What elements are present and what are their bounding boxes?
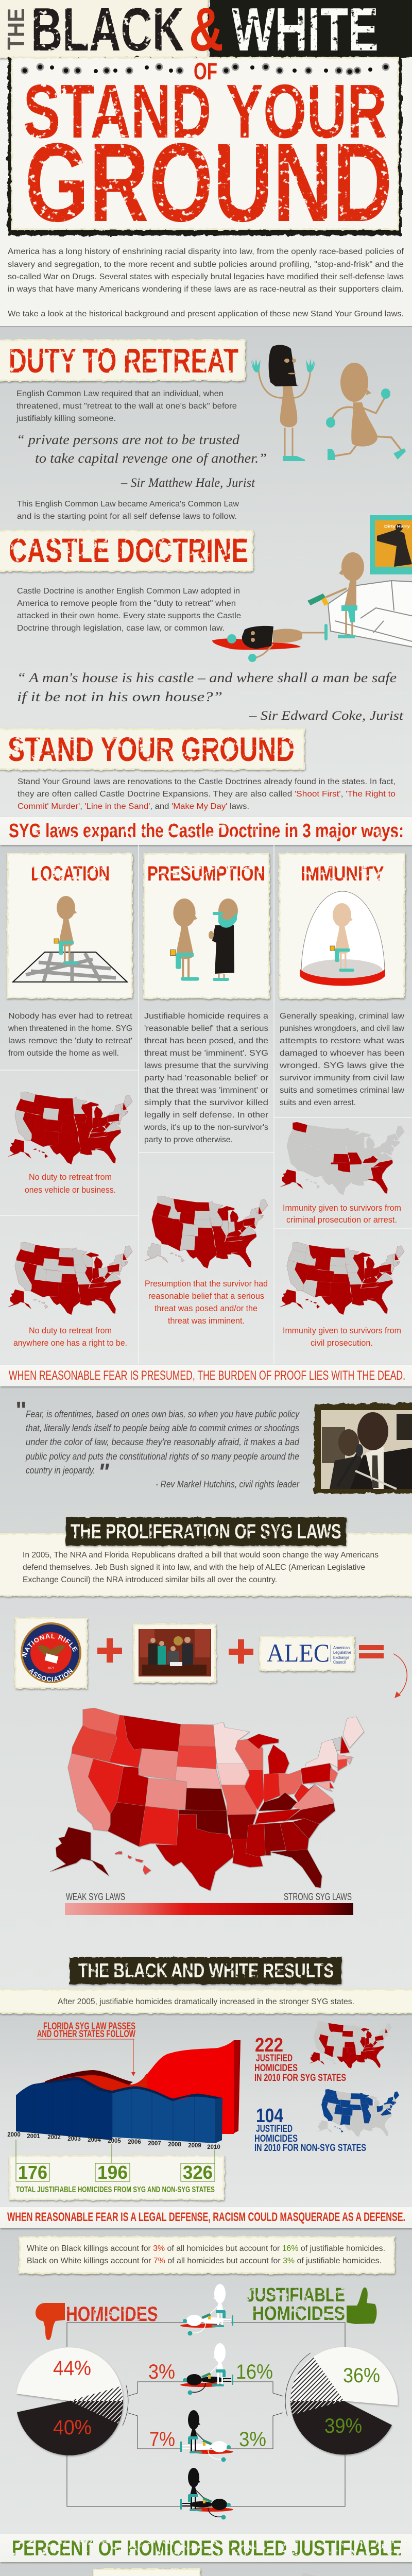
heading: justifiable homicides <box>246 2284 377 2325</box>
callout: 104 non-SYG states: JUSTIFIED <box>256 2124 293 2134</box>
callout: SYG states <box>4 2569 285 2576</box>
icon: equals and curved arrow <box>359 1645 407 1698</box>
map: presumption <box>145 1196 268 1268</box>
panel: immunity: survivor immunity from civil law <box>280 1074 404 1082</box>
axis year labels: 2001 <box>27 2133 40 2140</box>
panel: immunity: IMMUNITY <box>301 862 384 885</box>
section: castle doctrine: America to remove people from the "duty to retreat" when <box>17 599 236 608</box>
intro text: We take a look at the historical background and present application of these new Stand Your Ground laws. <box>8 310 404 318</box>
legend: weak to strong: WEAK SYG LAWS <box>66 1892 125 1903</box>
panel: immunity: Immunity given to survivors from <box>283 1326 401 1335</box>
chart: homicides vs justifiable homicides: 3% <box>148 2361 175 2383</box>
panel: presumption: simply that the survivor killed <box>144 1098 268 1107</box>
section: proliferation of SYG laws: In 2005, The NRA and Florida Republicans drafted a bill that would soon change the way Americans <box>23 1551 379 1560</box>
logo: National Rifle Association: NATIONAL RIFLE <box>22 1633 78 1657</box>
axis year labels: 2004 <box>88 2137 101 2143</box>
axis year labels: 2002 <box>47 2134 61 2141</box>
section: castle doctrine: – Sir Edward Coke, Jurist <box>249 709 404 723</box>
section: duty to retreat: English Common Law required that an individual, when <box>16 389 224 398</box>
axis year labels: 2008 <box>168 2142 181 2148</box>
banner: burden of proof <box>0 1365 412 1386</box>
map: SYG states small <box>309 2021 391 2069</box>
legend: weak to strong <box>65 1892 353 1915</box>
panel: location: No duty to retreat from <box>29 1326 112 1335</box>
quote: Hutchins: Fear, is oftentimes, based on ones own bias, so when you have public policy <box>26 1409 300 1419</box>
panel: presumption: Presumption that the survivor had <box>145 1279 268 1289</box>
axis year labels: 2007 <box>148 2141 161 2147</box>
section: castle doctrine: if it be not in his own house?” <box>17 689 222 704</box>
callout: Florida SYG passes: AND OTHER STATES FOLLOW <box>37 2029 135 2040</box>
panel: location <box>8 854 133 1348</box>
quote: Hutchins: under the color of law, because they're reasonably afraid, it makes a bad <box>26 1437 300 1447</box>
callout: 222 SYG states: IN 2010 FOR SYG STATES <box>254 2073 346 2083</box>
panel: presumption <box>144 854 269 1326</box>
panel: immunity: Immunity given to survivors from <box>283 1203 401 1213</box>
section: stand your ground: they are often called Castle Doctrine Expansions. They are also called 'Shoot First' , 'The Right to <box>18 790 396 799</box>
icon: person running away <box>326 363 406 460</box>
pie: homicides: 40% <box>53 2416 92 2439</box>
axis year labels: 2003 <box>67 2136 81 2142</box>
panel: immunity <box>279 854 404 1348</box>
panel: immunity: suits and even arrest. <box>280 1098 356 1107</box>
logo: ALEC <box>260 1637 354 1670</box>
section heading: black and white results: THE BLACK AND WHITE RESULTS <box>78 1960 334 1982</box>
panel: total justifiable homicides: TOTAL JUSTIFIABLE HOMICIDES FROM SYG AND NON-SYG STATES <box>16 2185 215 2194</box>
quote: Hutchins: - Rev Markel Hutchins, civil rights leader <box>156 1479 300 1489</box>
heading: homicides <box>36 2303 158 2340</box>
panel: immunity: suits and sometimes criminal law <box>280 1086 404 1095</box>
panel: immunity: attempts to restore what was <box>280 1037 404 1045</box>
panel: presumption: Justifiable homicide requires a <box>144 1012 268 1021</box>
panel: location: when threatened in the home. SYG <box>8 1024 132 1033</box>
quote: Hutchins <box>15 1397 412 1494</box>
panel: immunity: wronged. SYG laws give the <box>279 1061 404 1070</box>
axis year labels: 2005 <box>108 2138 121 2144</box>
icon: standing figure <box>170 899 199 981</box>
section: duty to retreat: threatened, must "retreat to the wall at one's back" before <box>16 402 237 411</box>
heading: justifiable homicides: HOMICIDES <box>252 2303 345 2325</box>
icon: plus <box>97 1638 122 1663</box>
logo: National Rifle Association <box>13 1617 90 1691</box>
panel: presumption: party had 'reasonable belief' or <box>144 1074 269 1082</box>
intro text: in ways that have many Americans wondering if these laws are as race-neutral as their supporters claim. <box>8 285 404 294</box>
section: proliferation of SYG laws: Exchange Council) the NRA introduced similar bills all over the country. <box>23 1575 277 1584</box>
panel: presumption: laws presume that the surviving <box>144 1061 268 1070</box>
legend: weak to strong: STRONG SYG LAWS <box>284 1892 352 1903</box>
icons: shooter and victim pairs <box>180 2284 233 2519</box>
panel: location: laws remove the 'duty to retreat' <box>8 1037 132 1045</box>
map: no duty anywhere <box>8 1242 132 1315</box>
heading: homicides: HOMICIDES <box>66 2303 158 2326</box>
panel: location: anywhere one has a right to be. <box>13 1338 127 1348</box>
logo: ALEC: Council <box>333 1660 346 1665</box>
panel: location: ones vehicle or business. <box>25 1185 116 1195</box>
panel: presumption: threat must be 'imminent'. SYG <box>144 1049 268 1058</box>
chart: homicides vs justifiable homicides: 3% <box>239 2428 266 2451</box>
panel: presumption: legally in self defense. In other <box>144 1111 269 1120</box>
callout: Florida SYG passes: FLORIDA SYG LAW PASSES <box>43 2021 135 2032</box>
section: duty to retreat: justifiably killing someone. <box>16 414 116 423</box>
section: duty to retreat: to take capital revenge one of another.” <box>35 451 267 466</box>
panel: presumption: reasonable belief that a serious <box>148 1291 264 1301</box>
intro text: America has a long history of enshrining racial disparity into law, from the openly race-based policies of <box>8 247 404 256</box>
panel: immunity: criminal prosecution or arrest. <box>286 1215 397 1225</box>
icon: couch <box>328 581 412 648</box>
intro text: so-called War on Drugs. Several states with especially brutal legacies have modified their self-defense laws <box>8 273 404 281</box>
callout: 104 non-SYG states: HOMICIDES <box>254 2133 298 2144</box>
icon: plus <box>229 1639 253 1664</box>
title block <box>0 0 412 327</box>
section: stand your ground <box>0 729 396 811</box>
axis year labels: 2006 <box>128 2139 141 2145</box>
logo: ALEC: Exchange <box>333 1655 349 1660</box>
panel: presumption: threat was imminent. <box>168 1316 245 1326</box>
paper: killings statistic <box>20 2237 394 2273</box>
section: castle doctrine: Castle Doctrine is another English Common Law adopted in <box>17 587 240 596</box>
icon: seated homeowner with gun <box>307 552 364 638</box>
map: SYG states <box>290 2573 404 2576</box>
map: no duty vehicle <box>8 1092 132 1164</box>
map: immunity criminal <box>280 1122 404 1195</box>
intro text: slavery and segregation, to the more recent and subtle policies around profiling, "stop-and-frisk" and the <box>8 260 404 269</box>
section: stand your ground: Commit' Murder' , 'Line in the Sand' , and 'Make My Day' laws. <box>18 802 249 811</box>
pie: homicides: 44% <box>53 2357 91 2380</box>
icon: figure in glass dome <box>300 891 385 986</box>
quote: Hutchins: " <box>98 1459 110 1485</box>
panel: immunity: damaged to whoever has been <box>280 1049 404 1058</box>
callout: 222 SYG states: JUSTIFIED <box>256 2053 293 2064</box>
panel: immunity: civil prosecution. <box>311 1338 373 1348</box>
panel: presumption: threat was posed and/or the <box>154 1303 258 1313</box>
panel: presumption: words, it's up to the non-survivor's <box>144 1123 268 1132</box>
logo: ALEC: ALEC <box>267 1638 330 1667</box>
quote: Hutchins: public policy and puts the constitutional rights of so many people around the <box>25 1451 299 1462</box>
quote: Hutchins: " <box>15 1397 27 1423</box>
section: duty to retreat: This English Common Law became America's Common Law <box>17 500 239 509</box>
area chart: justifiable homicides <box>7 2040 241 2150</box>
panel: immunity: Generally speaking, criminal law <box>280 1012 404 1021</box>
callout: Florida SYG passes <box>37 2021 135 2076</box>
title block: THE <box>3 8 29 50</box>
panel: location: LOCATION <box>31 862 110 885</box>
icon: judge <box>209 899 238 981</box>
section: duty to retreat: “ private persons are not to be trusted <box>16 432 240 447</box>
section: duty to retreat: DUTY TO RETREAT <box>9 342 238 380</box>
chart: homicides vs justifiable homicides: 16% <box>236 2361 273 2383</box>
pie: justifiable homicides <box>290 2347 398 2454</box>
panel: location: from outside the home as well. <box>8 1049 119 1058</box>
axis year labels: 2000 <box>7 2132 21 2138</box>
banner: racism masquerade <box>0 2207 412 2228</box>
heading: justifiable homicides: JUSTIFIABLE <box>246 2284 345 2306</box>
section: castle doctrine: “ A man's house is his castle – and where shall a man be safe <box>17 670 397 685</box>
logo: ALEC: American <box>333 1646 350 1650</box>
icon: dead robber in blood <box>212 624 328 662</box>
section: castle doctrine <box>0 515 412 723</box>
axis year labels: 2010 <box>207 2144 220 2150</box>
pie: justifiable homicides: 39% <box>324 2415 362 2437</box>
section: castle doctrine: attacked in their own home. Every state supports the Castle <box>17 612 241 620</box>
section: proliferation of SYG laws: defend themselves. Jeb Bush signed it into law, and with the help of ALEC (American Legislative <box>23 1563 365 1572</box>
panel: total justifiable homicides: 196 <box>97 2162 128 2183</box>
logo: National Rifle Association: ASSOCIATION <box>28 1668 73 1682</box>
axis year labels: 2009 <box>188 2143 201 2149</box>
paper: killings statistic: White on Black killings account for 3% of all homicides but account for 16% of justifiable homicides. <box>27 2244 385 2253</box>
quote: Hutchins: country in jeopardy. <box>26 1465 95 1476</box>
chart: homicides vs justifiable homicides <box>16 2284 398 2519</box>
callout: 104 non-SYG states: IN 2010 FOR NON-SYG STATES <box>254 2143 366 2154</box>
panel: location: Nobody has ever had to retreat <box>8 1012 133 1021</box>
panel: total justifiable homicides <box>10 2140 224 2199</box>
section: duty to retreat <box>0 340 406 521</box>
section heading: black and white results: After 2005, justifiable homicides dramatically increased in the stronger SYG states. <box>58 1997 354 2006</box>
photo: Rev Markel Hutchins <box>314 1403 412 1494</box>
section: proliferation of SYG laws <box>0 1517 412 1596</box>
section: duty to retreat: and is the starting point for all self defense laws to follow. <box>17 512 237 521</box>
icon: masked robber with hands up <box>251 345 315 461</box>
bullet holes <box>22 64 389 75</box>
section: stand your ground: Stand Your Ground laws are renovations to the Castle Doctrines already found in the states. In fact, <box>18 777 396 786</box>
logo: National Rifle Association: 1871 <box>47 1667 55 1670</box>
title block: OF <box>194 58 217 84</box>
section: castle doctrine: Doctrine through legislation, case law, or common law. <box>17 624 225 633</box>
map: strength of SYG laws <box>50 1708 364 1891</box>
panel: presumption: party to prove otherwise. <box>144 1136 233 1144</box>
intro text <box>8 247 404 318</box>
callout: 222 SYG states: 222 <box>255 2035 283 2056</box>
callout: 222 SYG states: HOMICIDES <box>254 2063 298 2074</box>
axis year labels <box>7 2132 220 2150</box>
callout: 222 SYG states <box>254 2021 391 2083</box>
icon: street map plane <box>13 952 127 982</box>
icon: Dirty Harry poster: Dirty Harry <box>384 525 410 529</box>
section: stand your ground: STAND YOUR GROUND <box>8 730 295 768</box>
logo: ALEC: Legislative <box>333 1650 351 1655</box>
callout: 104 non-SYG states <box>254 2089 399 2154</box>
map: immunity civil <box>280 1242 404 1315</box>
panel: presumption: threat has been posed, and the <box>144 1037 268 1045</box>
callout: 104 non-SYG states: 104 <box>256 2105 283 2127</box>
pie: justifiable homicides: 36% <box>343 2364 380 2387</box>
paper: killings statistic: Black on White killings account for 7% of all homicides but account for 3% of justifiable homicides. <box>27 2257 382 2265</box>
panel: immunity: punishes wrongdoers, and civil law <box>280 1024 404 1033</box>
section heading: black and white results <box>0 1957 412 2013</box>
chart: homicides vs justifiable homicides: 7% <box>149 2428 175 2451</box>
section: castle doctrine: CASTLE DOCTRINE <box>9 531 248 569</box>
panel: presumption: PRESUMPTION <box>147 862 265 885</box>
panel: total justifiable homicides: 176 <box>18 2162 47 2183</box>
photo: Jeb Bush signing <box>134 1624 215 1682</box>
icon: standing figure <box>54 896 78 964</box>
panel: presumption: that the threat was 'imminent' or <box>144 1086 269 1095</box>
section: duty to retreat: – Sir Matthew Hale, Jurist <box>121 476 255 490</box>
pie: homicides <box>16 2347 123 2455</box>
icon: Dirty Harry poster <box>370 515 412 574</box>
quote: Hutchins: that, literally lends itself to people being able to commit crimes or shootings <box>26 1423 299 1433</box>
map: non-SYG states small <box>317 2089 399 2137</box>
panel: total justifiable homicides: 326 <box>183 2162 213 2183</box>
panel: location: No duty to retreat from <box>29 1172 112 1182</box>
panel: presumption: 'reasonable belief' that a serious <box>144 1024 268 1033</box>
column dividers <box>0 845 412 1365</box>
